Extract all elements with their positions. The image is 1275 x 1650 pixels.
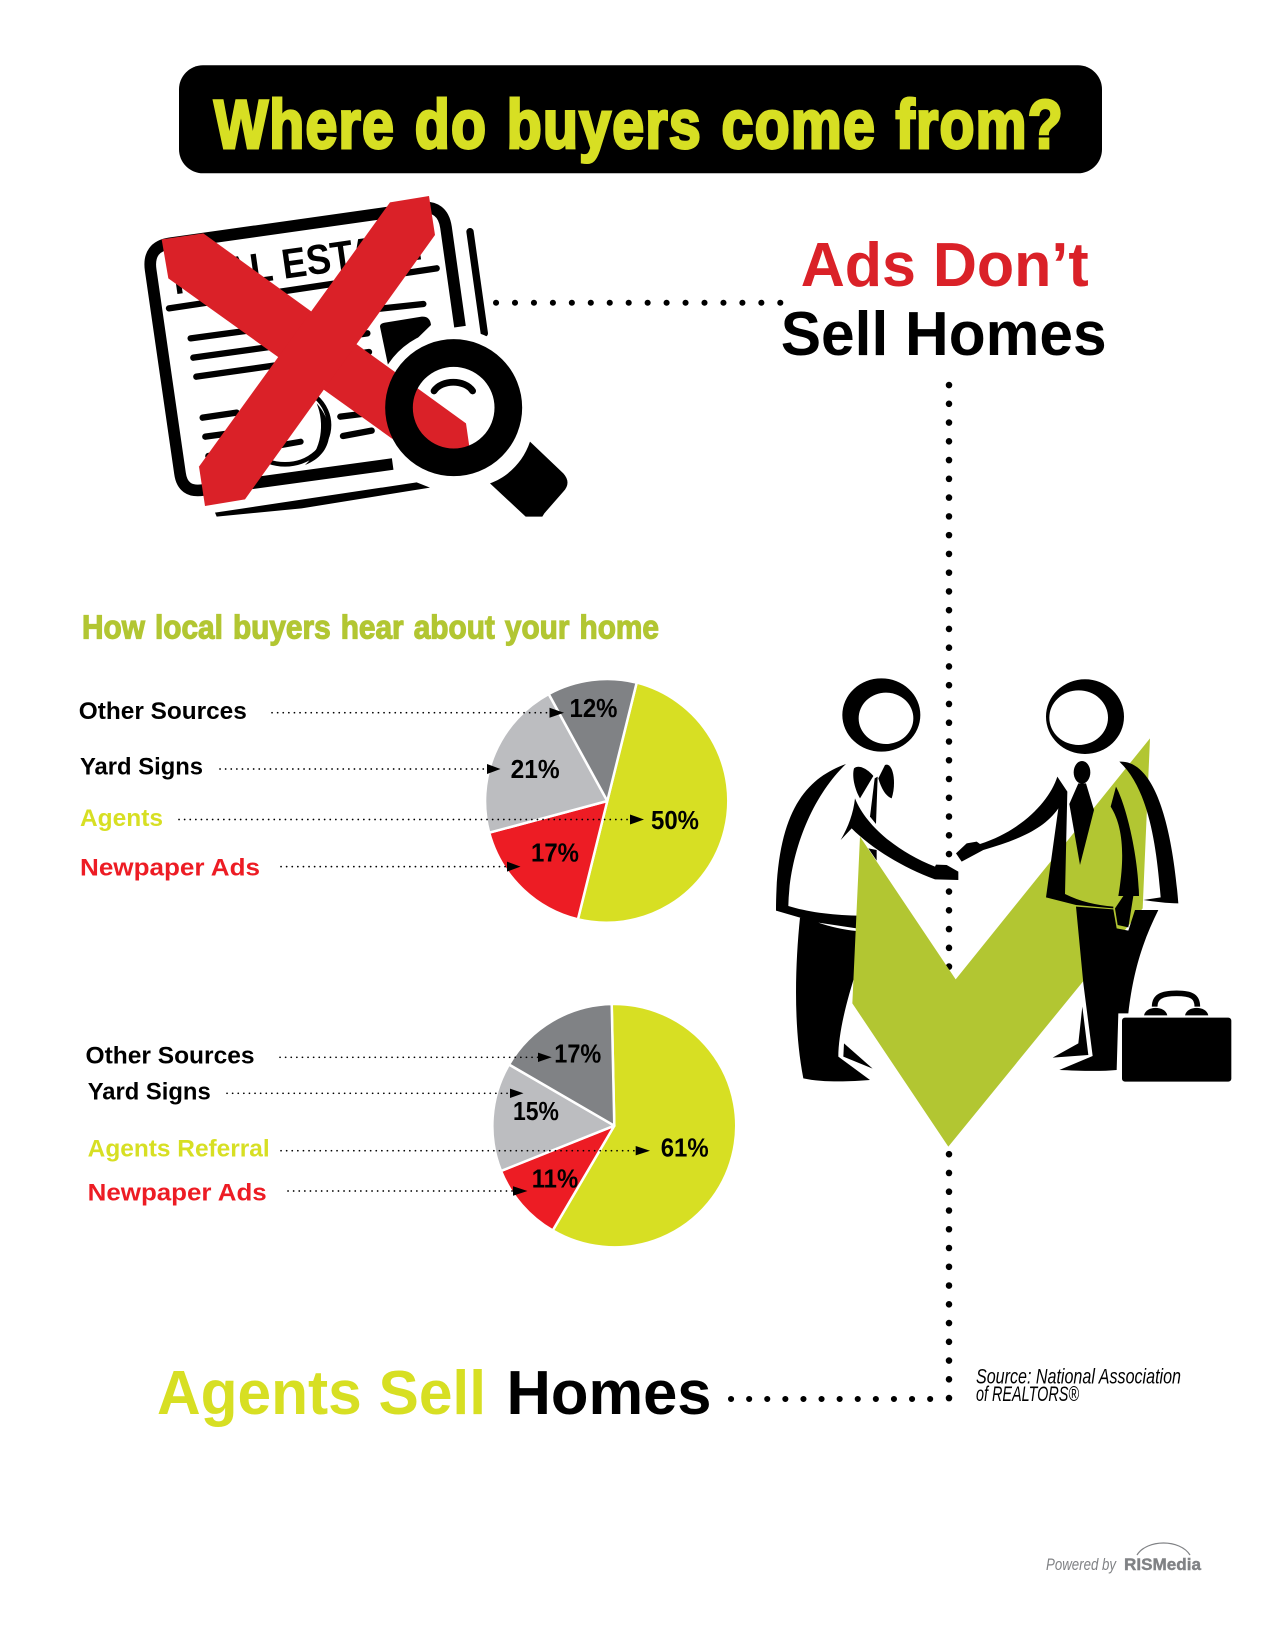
connector: dotted line from newspaper to heading (496, 300, 784, 306)
connector: dotted line from Agents Sell Homes (731, 1396, 935, 1402)
labels and leaders: referral buyers pie: 15% (513, 1096, 559, 1126)
heading: Ads Don't Sell Homes: Sell Homes (781, 300, 1107, 369)
section heading: How local buyers hear about your home (82, 608, 659, 646)
heading: Agents Sell Homes: Agents Sell (157, 1359, 486, 1428)
title banner: Where do buyers come from? (214, 86, 1064, 163)
heading: Ads Don't Sell Homes (781, 231, 1107, 369)
labels and leaders: local buyers pie: 50% (651, 805, 699, 835)
newspaper page: REAL ESTATE (170, 221, 424, 303)
logo: Powered by RISMedia: Powered by (1046, 1555, 1117, 1574)
labels and leaders: referral buyers pie: Agents Referral (88, 1135, 270, 1162)
labels and leaders: local buyers pie: Agents (80, 805, 163, 832)
right businessman (956, 679, 1178, 1071)
title banner (179, 65, 1102, 173)
briefcase (1121, 993, 1232, 1083)
labels and leaders: referral buyers pie: 61% (661, 1133, 709, 1163)
source note (976, 1365, 1181, 1406)
logo: Powered by RISMedia (1046, 1543, 1202, 1574)
icon: handshake with check mark and briefcase (776, 678, 1232, 1147)
labels and leaders: referral buyers pie (86, 1038, 709, 1206)
labels and leaders: referral buyers pie: Other Sources (86, 1042, 254, 1069)
green check mark (852, 738, 1150, 1147)
magnifying glass (399, 353, 567, 517)
pie chart: local buyers (485, 679, 728, 923)
labels and leaders: local buyers pie (79, 693, 699, 881)
pie chart: referral buyers (492, 1004, 736, 1247)
source note: Source: National Association (976, 1365, 1181, 1388)
labels and leaders: local buyers pie: 12% (570, 693, 618, 723)
newspaper page (150, 208, 484, 517)
connector: vertical dotted line (946, 385, 952, 1402)
source note: of REALTORS® (976, 1383, 1079, 1406)
labels and leaders: referral buyers pie: Newpaper Ads (88, 1180, 267, 1206)
heading: Ads Don't Sell Homes: Ads Don’t (801, 231, 1089, 300)
labels and leaders: referral buyers pie: Yard Signs (88, 1079, 211, 1106)
red X (162, 196, 469, 506)
labels and leaders: local buyers pie: 17% (531, 838, 579, 868)
logo: Powered by RISMedia: RISMedia (1124, 1555, 1202, 1574)
labels and leaders: referral buyers pie: 11% (532, 1163, 578, 1193)
left businessman (776, 678, 958, 1081)
heading: Agents Sell Homes: Homes (506, 1359, 712, 1428)
labels and leaders: local buyers pie: 21% (511, 754, 560, 784)
labels and leaders: referral buyers pie: 17% (554, 1038, 601, 1068)
labels and leaders: local buyers pie: Other Sources (79, 698, 247, 725)
magnifier halo (375, 329, 532, 486)
labels and leaders: local buyers pie: Newpaper Ads (80, 854, 260, 881)
heading: Agents Sell Homes (157, 1359, 712, 1428)
labels and leaders: local buyers pie: Yard Signs (80, 754, 203, 780)
icon: crossed-out real estate newspaper with magnifying glass (150, 196, 567, 517)
